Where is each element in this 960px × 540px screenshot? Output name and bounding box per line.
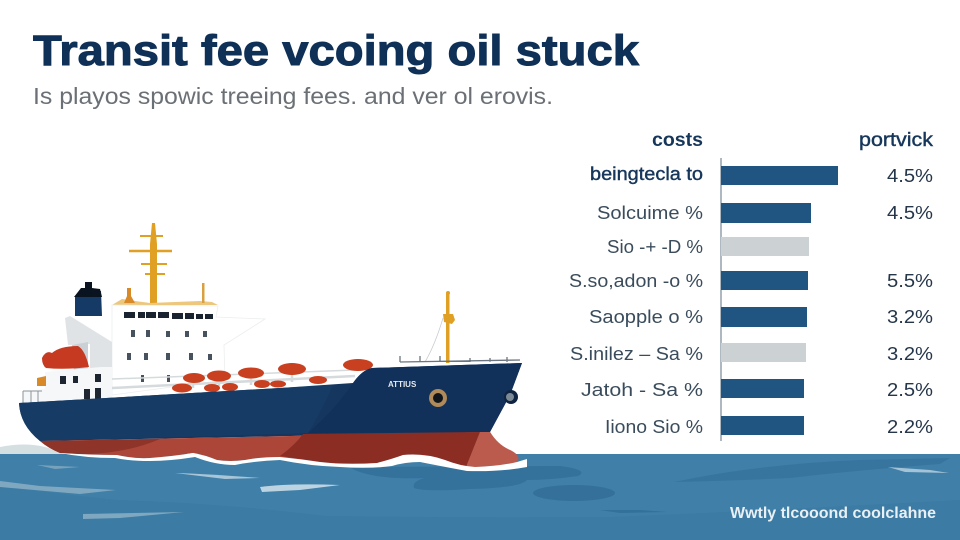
row 6 (570, 343, 933, 364)
source note: Wwtly tlcooond coolclahne (730, 505, 936, 522)
red boot (40, 432, 518, 467)
hawse pipe (429, 389, 447, 407)
row 2: 4.5% (887, 202, 933, 223)
row 8: Iiono Sio % (605, 417, 703, 437)
hull name: ATTIUS (388, 380, 417, 389)
bridge windows (124, 312, 213, 319)
cabin windows (127, 330, 212, 382)
row 4: S.so,adon -o % (569, 271, 703, 291)
row 5 (589, 306, 933, 327)
mast: main (129, 223, 172, 303)
orange tag (37, 376, 46, 386)
row 5: 3.2% (887, 306, 933, 327)
row 5: Saopple o % (589, 307, 703, 327)
bow wave (60, 453, 527, 471)
row 6: 3.2% (887, 343, 933, 364)
deck railing (112, 369, 355, 388)
row 2 (597, 202, 933, 223)
foam streaks (175, 473, 260, 479)
funnel (75, 282, 102, 316)
deck gear (112, 283, 218, 305)
row 7: Jatoh - Sa % (581, 380, 703, 400)
orange deck boats (172, 359, 373, 392)
lifeboat: stern (42, 346, 89, 369)
hull (19, 363, 522, 441)
row 7 (581, 379, 933, 400)
bow mast (443, 291, 455, 363)
row 4 (569, 270, 933, 291)
anchor (504, 390, 518, 404)
row 1 (590, 164, 933, 186)
row 2: Solcuime % (597, 203, 703, 223)
row 1: beingtecla to (590, 164, 703, 184)
subtitle: Is playos spowic treeing fees. and ver ol erovis. (33, 83, 553, 109)
row 8: 2.2% (887, 416, 933, 437)
row 4: 5.5% (887, 270, 933, 291)
row 1: 4.5% (887, 165, 933, 186)
chart (569, 130, 934, 441)
axis (720, 158, 722, 441)
column header: costs: costs (652, 130, 703, 151)
lower deckhouse (23, 367, 112, 404)
ship (19, 223, 527, 471)
title: Transit fee vcoing oil stuck (33, 27, 639, 75)
row 3 (607, 237, 809, 257)
row 3: Sio -+ -D % (607, 237, 703, 257)
column header: portvick: portvick (859, 130, 934, 151)
row 8 (605, 416, 933, 437)
superstructure (112, 305, 265, 395)
row 7: 2.5% (887, 379, 933, 400)
sea (0, 444, 960, 540)
row 6: S.inilez – Sa % (570, 344, 703, 364)
